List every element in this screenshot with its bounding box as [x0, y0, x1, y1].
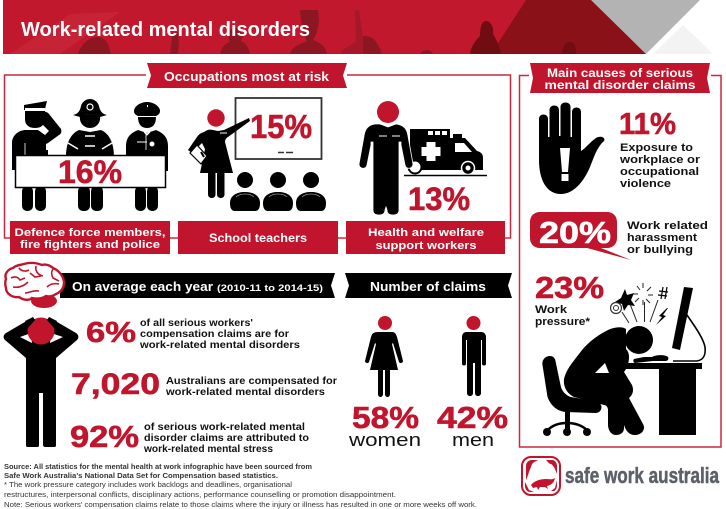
text: 7,020 description: work-related mental disorders [165, 387, 325, 398]
stat: 92%: 92% [70, 419, 139, 454]
heading: on average each year [60, 273, 335, 298]
icon: man [462, 316, 486, 396]
icon: defence, fire and police workers [12, 99, 168, 211]
text: 92% description: disorder claims are attributed to [144, 433, 309, 444]
heading: main causes: Main causes of serious [547, 68, 693, 80]
label: defence force: Defence force members, [14, 227, 166, 239]
label: health workers: support workers [376, 240, 476, 252]
source notes [4, 464, 477, 509]
stress symbols [615, 289, 635, 311]
heading: occupations [147, 63, 347, 88]
icon: health worker and ambulance [359, 101, 487, 215]
stat: 42% men: 42% [437, 400, 508, 435]
text: harassment: Work related [627, 220, 708, 232]
label: defence force [10, 221, 170, 254]
panel: main causes [520, 63, 721, 495]
stat: 58% women [348, 400, 421, 450]
stat: 42% men: men [452, 430, 494, 450]
text: exposure: Exposure to [620, 142, 693, 154]
sign with 16%: 16% [58, 154, 122, 190]
text: harassment: harassment [627, 232, 697, 244]
icon: stressed worker at desk [542, 283, 705, 436]
text: exposure: violence [620, 178, 671, 190]
heading: occupations: Occupations most at risk [164, 70, 329, 84]
stat: 13%: 13% [408, 181, 470, 217]
source notes: restructures, interpersonal conflicts, disciplinary actions, performance counselling or promotion disappointment. [4, 492, 396, 499]
panel frame [520, 76, 721, 447]
heading: number of claims [345, 273, 512, 298]
stat: 58% women: women [348, 430, 421, 450]
heading: on average each year: (2010-11 to 2014-15) [217, 283, 323, 294]
stat: 42% men [437, 400, 508, 450]
uniform details [25, 104, 154, 155]
icon: man clutching head [4, 317, 78, 447]
police officer [134, 102, 160, 116]
text: 6% description: compensation claims are for [140, 329, 289, 340]
stat: 20% speech bubble [530, 212, 631, 260]
panel frame [4, 75, 510, 238]
firefighter [73, 99, 107, 117]
source notes: Source: All statistics for the mental health at work infographic have been sourced from [4, 464, 312, 471]
sign with 16% [16, 154, 166, 190]
title: Work-related mental disorders [21, 19, 310, 41]
soldier [24, 101, 47, 110]
stat: 20% speech bubble: 20% [539, 215, 611, 250]
text: work pressure: Work [535, 304, 568, 316]
stat: 58% women: 58% [352, 400, 419, 435]
source notes: * The work pressure category includes work backlogs and deadlines, organisational [4, 482, 292, 489]
heading: main causes: mental disorder claims [544, 80, 696, 92]
source notes: Safe Work Australia's National Data Set for Compensation based statistics. [4, 473, 278, 480]
text: 92% description: work-related mental stress [143, 444, 273, 455]
heading: main causes [530, 63, 710, 93]
text: work pressure: pressure* [535, 316, 591, 328]
icon: teacher with classroom [188, 98, 326, 211]
icon: brain [5, 263, 64, 308]
stat: 11%: 11% [619, 106, 676, 141]
logo: safe work australia [522, 457, 720, 495]
label: health workers [346, 221, 505, 254]
stat: 7,020: 7,020 [71, 368, 160, 401]
stat: 23%: 23% [535, 270, 604, 305]
header banner [3, 0, 713, 54]
heading: on average each year: On average each year [72, 280, 213, 294]
heading: number of claims: Number of claims [370, 280, 486, 294]
text: harassment: or bullying [627, 244, 693, 256]
icon: raised hand with warning [539, 102, 604, 194]
stat: 15%: 15% [250, 108, 312, 145]
text: exposure: workplace or [619, 154, 701, 166]
icon: woman [365, 316, 403, 397]
label: defence force: fire fighters and police [20, 239, 160, 251]
label: school teachers [178, 221, 338, 254]
panel: occupations most at risk [4, 63, 510, 254]
text: 7,020 description: Australians are compensated for [166, 376, 337, 387]
stat: 6%: 6% [86, 317, 136, 349]
text: 6% description: of all serious workers' [140, 318, 253, 329]
text: 6% description: work-related mental disorders [139, 340, 300, 351]
text: 92% description: of serious work-related mental [144, 422, 305, 433]
students [230, 172, 326, 211]
source notes: Note: Serious workers' compensation claims relate to those claims where the injury or illness has resulted in one or more weeks off work. [4, 502, 477, 509]
text: exposure: occupational [620, 166, 699, 178]
label: health workers: Health and welfare [368, 227, 484, 239]
label: school teachers: School teachers [209, 233, 307, 245]
